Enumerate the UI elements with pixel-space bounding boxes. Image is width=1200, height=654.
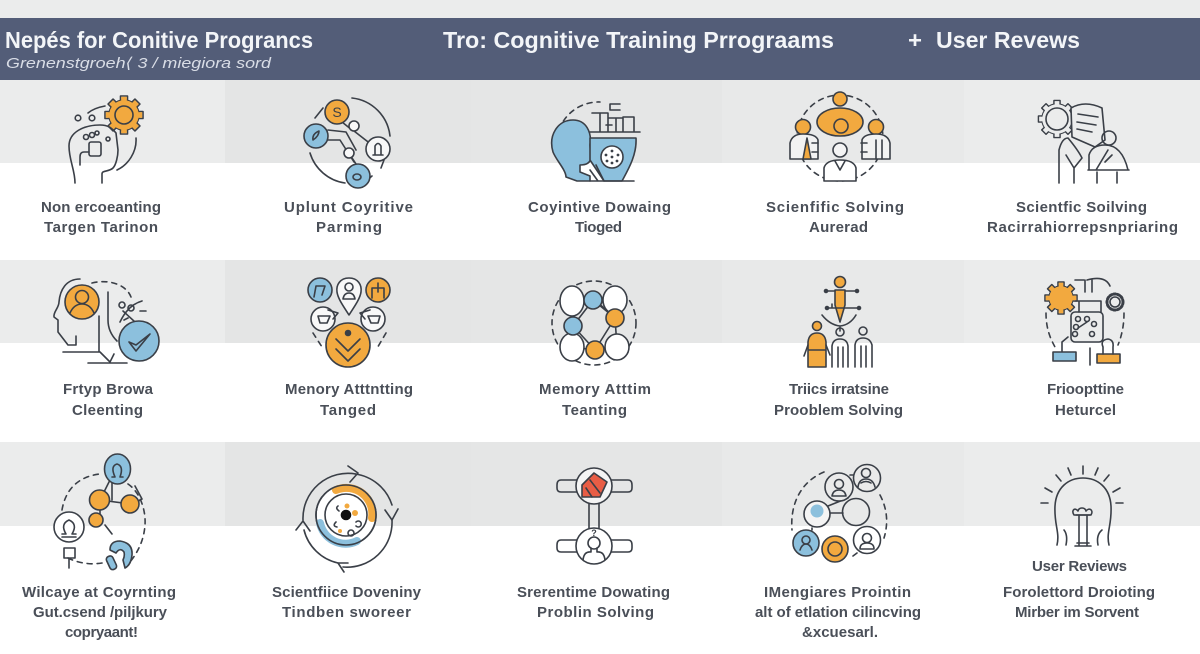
label: Tioged [575,219,622,236]
label: Scienfific Solving [766,199,904,216]
icon: head and funnel [552,102,640,181]
icon: profile with check badge [54,279,159,363]
label [272,584,422,621]
icon: linked circles [557,468,632,564]
label [41,199,161,236]
label [1003,558,1155,621]
icon: team in circle [790,92,890,181]
label: Problin Solving [537,604,654,621]
label: User Reviews [1032,558,1127,575]
label: Triics irratsine [789,381,889,398]
icon: connected nodes in circle: S [332,104,342,120]
label: Aurerad [809,219,868,236]
label: Coyintive Dowaing [528,199,671,216]
panel: row 1 column 5 [987,100,1178,236]
panel: row 3 column 1 [22,454,176,641]
label: copryaant! [65,624,138,641]
icon: memory map [308,278,390,367]
label [755,584,921,641]
label: Cleenting [72,402,143,419]
label [987,199,1178,236]
icon: community nodes [792,464,887,562]
subtitle: Grenenstgroeh⟨ 3 / miegiora sord [6,55,272,72]
icon: figures and leader [804,276,872,367]
label [1047,381,1124,419]
panel: row 3 column 3 [517,468,670,621]
label: &xcuesarl. [802,624,878,641]
panel: row 2 column 2 [285,278,413,419]
panel: row 2 column 5 [1045,278,1124,419]
label: Wilcaye at Coyrnting [22,584,176,601]
plus sign: + [908,27,922,53]
label: Memory Atttim [539,381,651,398]
label: alt of etlation cilincving [755,604,921,621]
label: Parming [316,219,382,236]
icon: lab jar and gears [1045,278,1124,365]
label [285,381,413,419]
panel: row 1 column 1 [41,96,161,236]
icon: neural network [552,281,636,365]
label: Tindben sworeer [282,604,411,621]
label: Non ercoeanting [41,199,161,216]
label: Prooblem Solving [774,402,903,419]
panel: row 2 column 3 [539,281,651,419]
title: right heading: User Revews [936,27,1080,53]
label: Scientfiice Doveniny [272,584,422,601]
label [517,584,670,621]
label: Uplunt Coyritive [284,199,413,216]
panel: row 3 column 2 [272,466,422,621]
panel: row 1 column 4 [766,92,904,236]
panel: row 3 column 4 [755,464,921,641]
label [766,199,904,236]
panel: row 2 column 4 [774,276,903,419]
label: Tanged [320,402,376,419]
panel: row 1 column 2 [284,98,413,236]
icon: head with gear [69,96,143,183]
label: Scientfic Soilving [1016,199,1147,216]
label [539,381,651,419]
label: Gut.csend /piljkury [33,604,168,621]
label: Teanting [562,402,627,419]
label: Srerentime Dowating [517,584,670,601]
icon: light bulb [1041,466,1123,546]
label: IMengiares Prointin [764,584,911,601]
panel: row 1 column 3 [528,102,671,236]
icon: linked circles: ? [591,528,597,538]
label [284,199,413,236]
panel: row 2 column 1 [54,279,159,419]
label [528,199,671,236]
title: centre heading: Tro: Cognitive Training Prrograams [443,27,834,53]
label [63,381,154,419]
label: Frtyp Browa [63,381,154,398]
label: Racirrahiorrepsnpriaring [987,219,1178,236]
label: Frioopttine [1047,381,1124,398]
label [22,584,176,641]
label: Forolettord Droioting [1003,584,1155,601]
icon: gear, document and people [1038,100,1129,183]
icon: node graph with headset [54,454,145,571]
label: Heturcel [1055,402,1116,419]
label: Mirber im Sorvent [1015,604,1139,621]
panel: row 3 column 5 [1003,466,1155,621]
label: Menory Atttntting [285,381,413,398]
title: left heading: Nepés for Conitive Prograncs [5,27,313,53]
header banner [0,18,1200,80]
label [774,381,903,419]
label: Targen Tarinon [44,219,158,236]
icon: target cycle [296,466,398,572]
